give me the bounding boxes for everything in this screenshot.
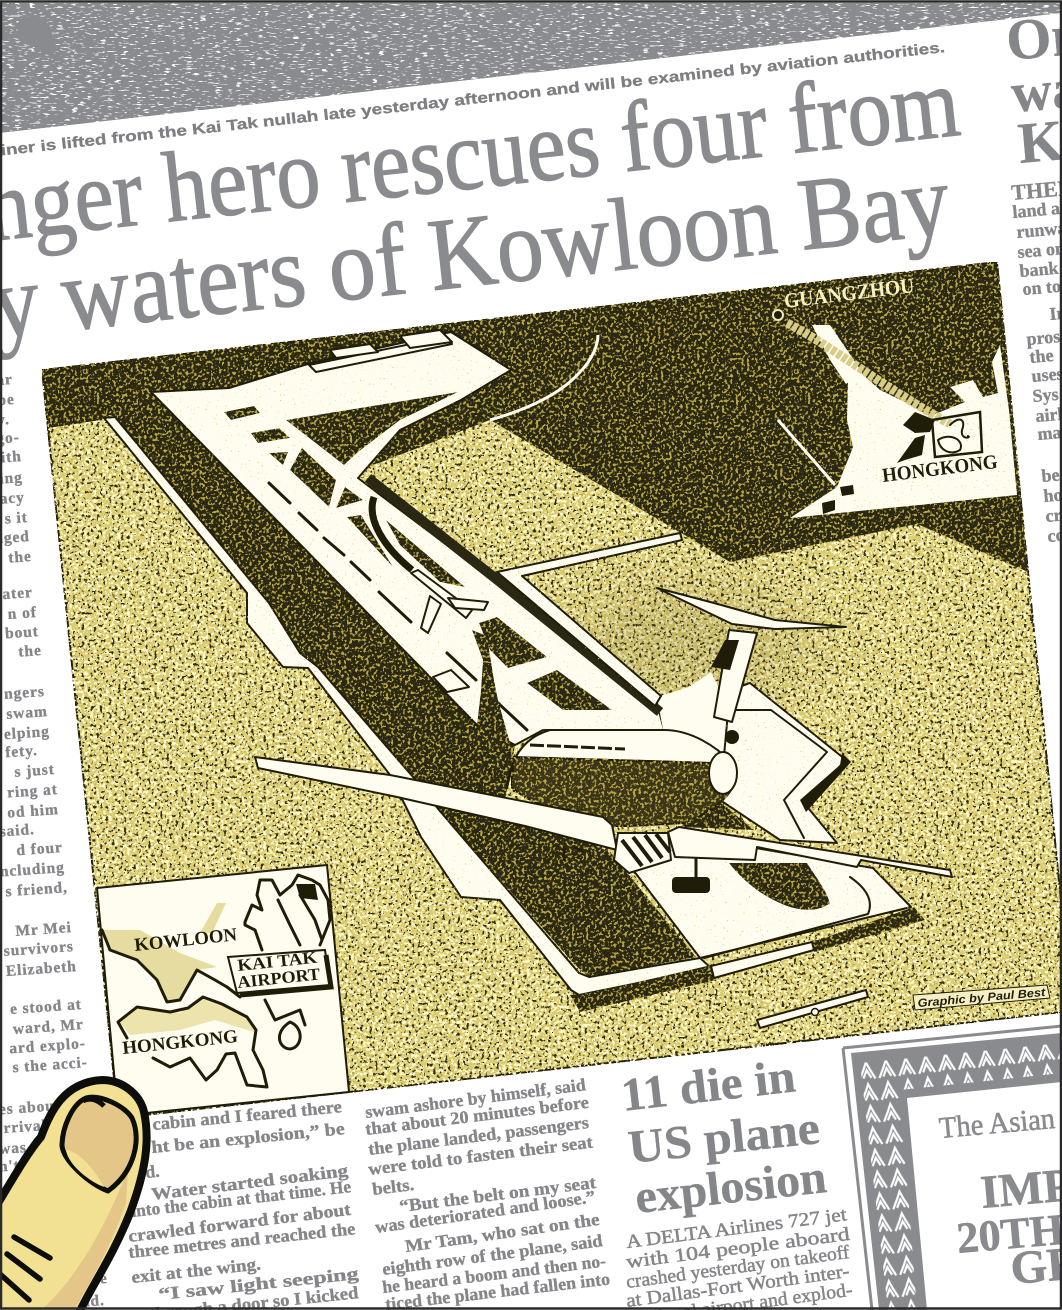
airport box shadow [240,955,331,995]
Kai Tak airport label box [228,950,330,993]
flight route [787,323,950,424]
apron dark edge [800,753,851,812]
tailplane [657,588,846,629]
lower article columns: d. [144,1161,160,1182]
KAI TAK label: KAI TAK [236,948,319,975]
advertisement text [938,1102,1062,1295]
lower article columns: three metres and reached the [127,1218,356,1262]
left side article column: the [18,642,42,661]
lower article columns: eighth row of the plane, said [381,1230,604,1279]
big airliner [255,588,952,893]
left side article column: s the acci- [12,1054,88,1076]
taxiway holes [224,406,612,710]
east apron inner line [736,710,827,838]
taxiway loop [497,533,682,706]
coast land [790,345,1017,518]
lower article columns: “But the belt on my seat [398,1172,597,1216]
knuckle creases [0,1237,50,1300]
right side article column: the [1029,345,1054,367]
lower article columns: Water started soaking [150,1160,349,1204]
left side article column: ater [2,584,33,603]
story body text [625,1204,854,1310]
left side article column: n of [7,604,37,623]
dark harbour water, west of runway [97,392,696,977]
nose [709,752,737,794]
left side article column: ward, Mr [12,1016,84,1038]
left side article column: ring at [7,781,58,802]
Hong Kong locator box [932,412,982,457]
Guangzhou marker [773,310,783,320]
lower article columns: swam ashore by himself, said [364,1074,587,1122]
story body text: with 104 people aboard [625,1224,851,1273]
left side article column: fety. [5,742,38,761]
curved taxi line [490,335,598,420]
small hangar outline [433,670,469,692]
left side article column: Elizabeth [5,958,77,980]
left wing [255,757,617,850]
fingernail [62,1097,136,1191]
island blob [897,435,925,463]
fin [714,630,757,722]
left side article column: es about [0,1097,61,1118]
lower article columns: Mr Tam, who sat on the [404,1209,601,1256]
left side article column: s it [4,509,28,528]
apron curve line [704,877,870,958]
bottom white strip [711,942,814,978]
left side article column: s just [14,761,55,781]
Hong Kong label: HONGKONG [881,451,999,487]
story headline: 11 die in US plane explosion [618,1050,829,1224]
darker haze on north-east ground [560,580,820,700]
tiny vehicle at bottom [757,990,868,1028]
right side article column: pros [1026,326,1061,349]
lower article columns: cabin and I feared there [151,1096,343,1134]
right side article column [1003,1,1062,546]
small taxiing jet [411,570,488,633]
Hong Kong north shore fill [118,997,257,1035]
fuselage belly [511,757,737,827]
dark coast blots [822,485,854,514]
right side article column: bank [1019,258,1059,281]
left side article column: swam [6,703,48,723]
nail highlight [66,1150,104,1187]
land along the route [812,325,862,384]
lower article columns: were told to fasten their seat [367,1132,594,1179]
north basin [286,392,458,465]
left side article column: s friend, [5,879,68,900]
story body text: A DELTA Airlines 727 jet [625,1204,849,1253]
advertisement text: The Asian [938,1102,1056,1145]
engine dot [725,730,739,744]
right wing [668,827,952,877]
left side article column: bout [4,623,39,642]
southern islands [265,1000,305,1049]
ornate border [843,1026,1062,1310]
window line [530,745,625,749]
landing gear [564,846,710,893]
dark spike [472,630,512,760]
dark triangle under nose [679,803,754,830]
fin dark block [711,640,739,670]
story headline: 11 die in US plane explosion: US plane [626,1102,822,1174]
story body text: crashed yesterday on takeoff [625,1242,851,1293]
lower article columns: exit at the wing. [130,1253,262,1287]
south apron [618,833,911,958]
coast detail in box [938,420,969,452]
runway centre line [269,483,527,730]
headline [0,46,965,361]
Kowloon land fill [102,930,217,1002]
finger skin [0,1080,147,1310]
right side article column: cr [1045,505,1062,526]
main illustration: Kai Tak airport graphic [42,262,1062,1118]
photo caption: liner is lifted from the Kai Tak nullah late yesterday afternoon and will be examined by aviation authorities. [0,39,946,160]
dark coast patch [296,884,318,900]
left side article column: survivors [3,938,74,960]
left side article column: elping [3,723,50,743]
island fill [200,903,226,933]
left side article column: me [86,1270,108,1288]
left side article column: e stood at [9,996,82,1018]
story headline: 11 die in US plane explosion: explosion [633,1151,829,1224]
lower article columns: crawled forward for about [127,1199,352,1246]
graphic credit box: Graphic by Paul Best [917,987,1047,1010]
Guangzhou label: GUANGZHOU [783,273,916,313]
Hong Kong island coast [118,997,267,1087]
left side article column: rrival [3,1117,47,1137]
left side article column: ut [92,1249,108,1267]
lower article columns: was deteriorated and loose.” [374,1186,596,1237]
shaded side [40,1170,128,1310]
dark strip along runway [368,478,660,712]
left side article column: Mr Mei [15,919,72,940]
advertisement box [843,1026,1062,1310]
fuselage upper [507,730,736,788]
lower article columns: belts. [371,1174,415,1199]
left side article column: said. [0,821,35,840]
left side article column: ncluding [0,859,65,881]
top press photo of the airliner [0,3,1062,133]
story headline: 11 die in US plane explosion: 11 die in [618,1050,798,1122]
inset map: Guangzhou to Hong Kong [773,273,1017,518]
terminal buildings [309,330,452,372]
dark harbour water, north [42,262,1028,572]
right side article column: be [1041,464,1060,486]
HONGKONG label: HONGKONG [121,1027,239,1059]
right side article column: on to [1022,276,1062,299]
south-east dark breakwater [812,907,925,952]
dark leaf basin [729,863,830,910]
map panel [97,865,349,1116]
thin white coast line [778,420,835,485]
headline: y waters of Kowloon Bay [0,143,955,361]
lower article columns: the plane landed, passengers [367,1112,590,1159]
right side article column: ma [1037,422,1062,444]
black curved taxiway [372,497,412,570]
left side article column: d four [16,839,63,859]
lower article columns: that about 20 minutes before [364,1092,590,1139]
Kowloon coast [102,930,240,1002]
left side article column: ngers [4,683,45,703]
right side article column: Sys [1032,384,1059,406]
ground texture [42,262,1062,1118]
left side article column: ard explo- [9,1035,86,1057]
inset map: Hong Kong and Kowloon [97,865,349,1116]
east apron [720,683,846,843]
lower article columns: “I saw light seeping [157,1263,360,1304]
left side article column [0,371,108,1310]
cuticle mark [83,1099,104,1106]
boarding stairs hatch [614,833,671,873]
KOWLOON label: KOWLOON [133,925,239,956]
dark coastal blob [903,412,935,433]
lower article columns: into the cabin at that time. He [130,1176,352,1221]
lower article columns: ht be an explosion,” be [150,1118,346,1157]
New Territories islands [245,875,330,950]
lower article columns [127,1074,611,1310]
cartoon finger pointing at the map [0,1080,147,1310]
left side article column: od him [7,801,59,822]
runway and apron [151,332,664,745]
left side article column: the [8,548,32,567]
AIRPORT label: AIRPORT [236,964,322,992]
lower article columns: he heard a boom and then no- [381,1250,607,1297]
apron under the tail [657,672,736,767]
south dark breakwater [570,965,716,1012]
outer seawall strip [104,417,711,995]
